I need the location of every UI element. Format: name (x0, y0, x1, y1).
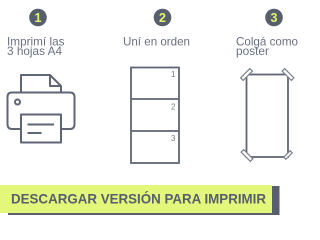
step 1 text: 3 hojas A4 (7, 44, 62, 58)
download button: DESCARGAR VERSIÓN PARA IMPRIMIR (11, 189, 266, 206)
step 1 text: Imprimí las (7, 34, 64, 48)
step 2 number badge: 2 (159, 11, 166, 25)
step 3 text: Colgá como (236, 34, 298, 48)
step 1 number badge (29, 9, 47, 26)
icon: three stacked sheets: 3 (171, 134, 176, 143)
icon: three stacked sheets: 2 (171, 102, 176, 112)
download button (0, 185, 280, 215)
step 1 text (7, 34, 64, 58)
step 3 text (236, 34, 298, 58)
step 3 number badge (265, 9, 283, 26)
icon: printer (8, 75, 74, 142)
step 2 number badge (154, 9, 171, 26)
icon: poster taped to wall (241, 69, 294, 161)
step 3 text: poster (236, 44, 269, 58)
step 3 number badge: 3 (271, 11, 278, 25)
step 2 text: Uní en orden (123, 34, 190, 48)
step 1 number badge: 1 (35, 11, 42, 25)
icon: three stacked sheets (131, 68, 179, 163)
icon: three stacked sheets: 1 (171, 70, 176, 79)
